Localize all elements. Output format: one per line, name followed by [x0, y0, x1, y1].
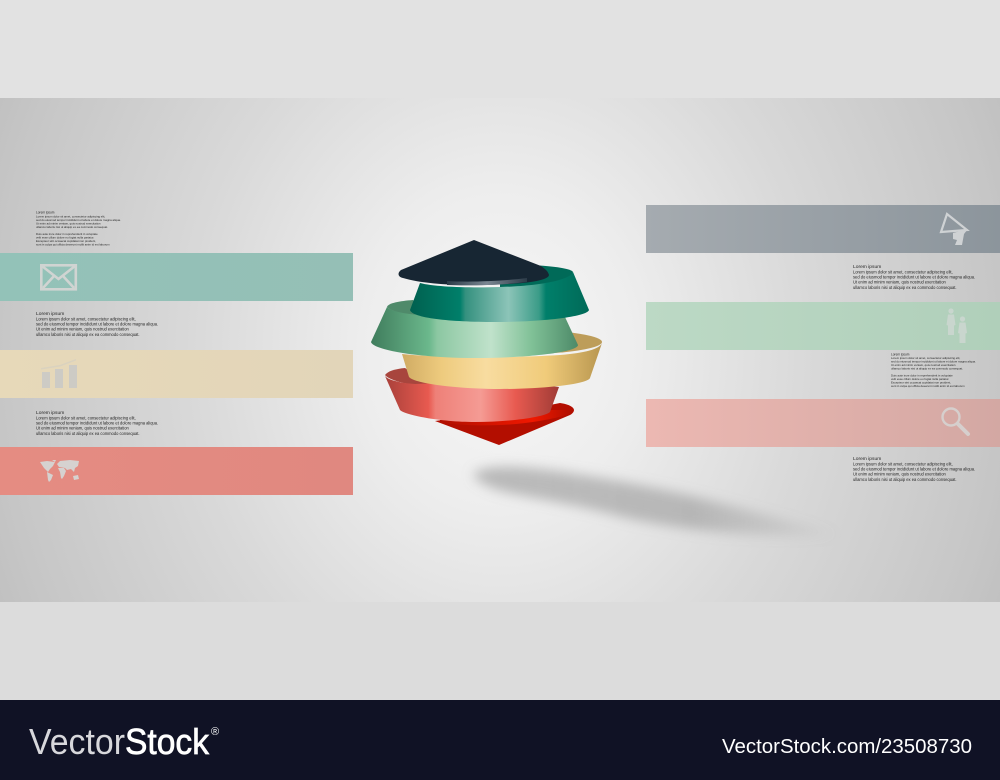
text block: right top: sed do eiusmod tempor incididunt ut labore et dolore magna aliqua. [853, 274, 975, 280]
slice: red [385, 368, 559, 422]
text block: right middle: Excepteur sint occaecat cupidatat non proident, [891, 380, 951, 384]
text block: left top: Ut enim ad minim veniam, quis nostrud exercitation [36, 222, 101, 226]
slice: dark cone [399, 240, 549, 285]
text block: right bottom: Lorem ipsum [853, 456, 881, 462]
text block: left bottom: Ut enim ad minim veniam, quis nostrud exercitation [36, 426, 130, 431]
icon: megaphone [941, 214, 968, 245]
text block: left top: Duis aute irure dolor in reprehenderit in voluptate [36, 232, 98, 236]
slice: teal [410, 265, 589, 322]
right bar 1: slate [646, 205, 1000, 253]
footer trademark: ® [211, 726, 219, 738]
text block: left middle: sed do eiusmod tempor incididunt ut labore et dolore magna aliqua. [36, 322, 158, 326]
main background panel [0, 98, 1000, 602]
sliced sphere diagram [371, 240, 602, 445]
text block: left middle: ullamco laboris nisi ut aliquip ex ea commodo consequat. [36, 332, 140, 337]
footer logo: Vector: Vector [29, 721, 125, 762]
text block: right middle: ullamco laboris nisi ut aliquip ex ea commodo consequat. [891, 366, 963, 370]
text block: left bottom: ullamco laboris nisi ut aliquip ex ea commodo consequat. [36, 431, 140, 436]
text block: right middle: Duis aute irure dolor in reprehenderit in voluptate [891, 374, 953, 378]
text block: left bottom: sed do eiusmod tempor incididunt ut labore et dolore magna aliqua. [36, 420, 158, 426]
slice: yellow [402, 329, 602, 389]
text block: right bottom: Ut enim ad minim veniam, quis nostrud exercitation [853, 472, 947, 477]
icon: envelope [41, 265, 76, 289]
text block: right bottom: ullamco laboris nisi ut aliquip ex ea commodo consequat. [853, 477, 957, 482]
icon: world map [40, 460, 79, 482]
right bar 2: green [646, 302, 1000, 350]
text block: left middle: Lorem ipsum [36, 311, 64, 317]
left bar 3: red [0, 447, 353, 495]
text block: right middle: velit esse cillum dolore eu fugiat nulla pariatur. [891, 377, 949, 381]
text block: left middle: Ut enim ad minim veniam, quis nostrud exercitation [36, 327, 130, 332]
text block: right bottom [853, 456, 975, 482]
left bar 1: teal [0, 253, 353, 301]
slice: green [371, 300, 578, 358]
text block: left middle [36, 311, 158, 337]
text block: right middle [891, 352, 976, 388]
footer image id: VectorStock.com/23508730 [722, 736, 972, 758]
text block: left bottom [36, 410, 158, 436]
text block: left top: sunt in culpa qui officia deserunt mollit anim id est laborum [36, 242, 110, 246]
text block: left top: Excepteur sint occaecat cupidatat non proident, [36, 239, 96, 243]
text block: left top: ullamco laboris nisi ut aliquip ex ea commodo consequat. [36, 225, 108, 229]
text block: right bottom: sed do eiusmod tempor incididunt ut labore et dolore magna aliqua. [853, 466, 975, 472]
icon: two people [946, 308, 967, 343]
top band [0, 0, 1000, 98]
text block: left top: Lorem ipsum [36, 210, 55, 214]
text block: left bottom: Lorem ipsum dolor sit amet, consectetur adipiscing elit, [36, 415, 136, 420]
text block: left middle: Lorem ipsum dolor sit amet, consectetur adipiscing elit, [36, 316, 136, 321]
text block: right middle: Lorem ipsum [891, 352, 910, 356]
bottom band [0, 602, 1000, 700]
icon: magnifier [942, 408, 968, 434]
text block: left top [36, 210, 121, 246]
text block: right middle: Lorem ipsum dolor sit amet, consectetur adipiscing elit, [891, 356, 960, 360]
text block: left top: Lorem ipsum dolor sit amet, consectetur adipiscing elit, [36, 214, 105, 218]
text block: left top: velit esse cillum dolore eu fugiat nulla pariatur. [36, 236, 94, 240]
text block: right middle: Ut enim ad minim veniam, quis nostrud exercitation [891, 363, 956, 367]
left bar 2: sand [0, 350, 353, 398]
text block: right middle: sed do eiusmod tempor incididunt ut labore et dolore magna aliqua. [891, 360, 976, 364]
text block: right top: Lorem ipsum [853, 264, 881, 270]
text block: left bottom: Lorem ipsum [36, 410, 64, 416]
text block: right middle: sunt in culpa qui officia deserunt mollit anim id est laborum [891, 384, 965, 388]
text block: right top: Lorem ipsum dolor sit amet, consectetur adipiscing elit, [853, 269, 953, 274]
text block: right top [853, 264, 975, 290]
sphere shadow [474, 467, 840, 536]
slice: red tip [435, 403, 574, 445]
text block: right bottom: Lorem ipsum dolor sit amet, consectetur adipiscing elit, [853, 461, 953, 466]
footer bar [0, 700, 1000, 780]
footer logo: Stock: Stock [125, 721, 210, 762]
icon: bar chart [41, 359, 77, 388]
right bar 3: pink [646, 399, 1000, 447]
text block: right top: Ut enim ad minim veniam, quis nostrud exercitation [853, 280, 947, 285]
text block: right top: ullamco laboris nisi ut aliquip ex ea commodo consequat. [853, 285, 957, 290]
text block: left top: sed do eiusmod tempor incididunt ut labore et dolore magna aliqua. [36, 218, 121, 222]
